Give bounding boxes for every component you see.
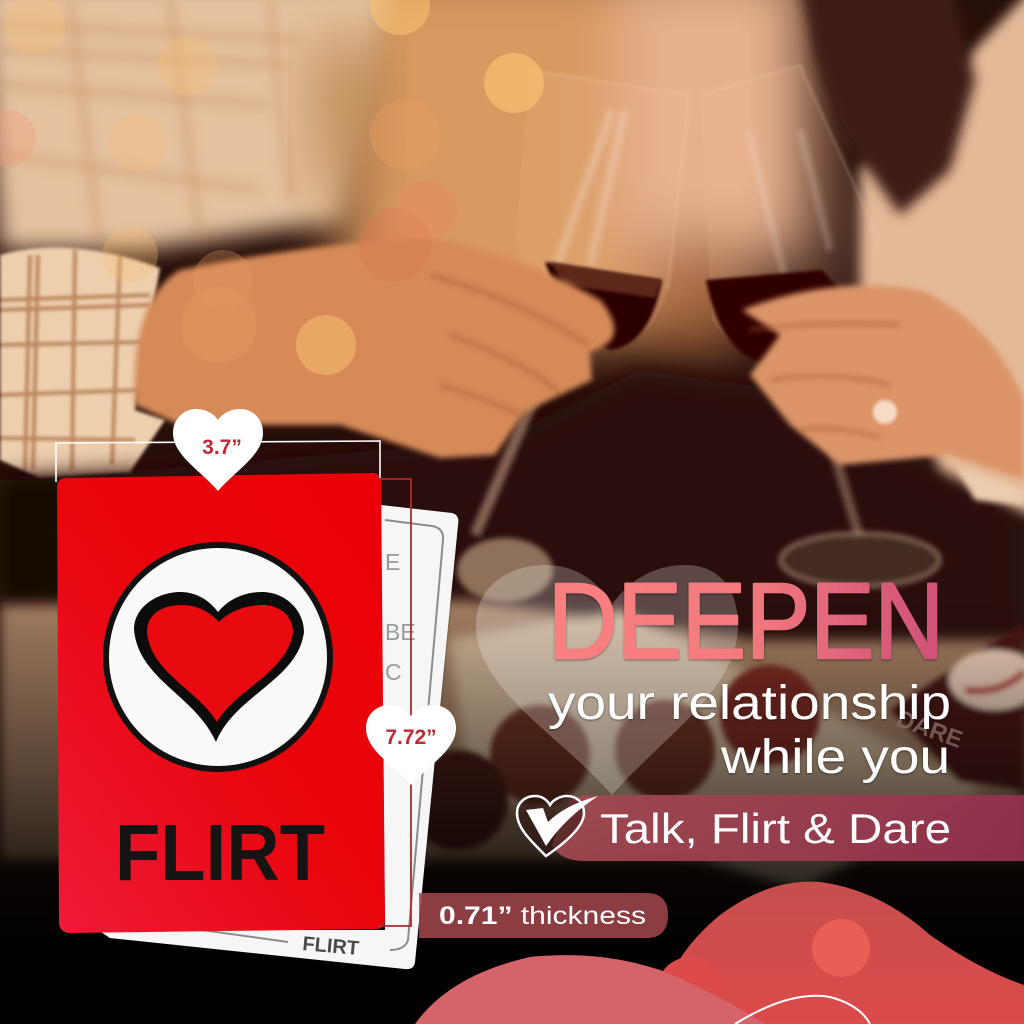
woman's hand xyxy=(742,286,1024,480)
card logo circle xyxy=(106,545,330,769)
back card: white: FLIRT xyxy=(302,933,360,960)
banner: Talk, Flirt & Dare xyxy=(552,795,1024,861)
pill: thickness: 0.71” thickness xyxy=(439,902,646,930)
woman's hair xyxy=(800,0,975,215)
dimension: height bracket xyxy=(378,479,411,926)
pill: thickness xyxy=(419,893,668,938)
back card: white xyxy=(98,505,458,969)
bottom decorative waves xyxy=(415,882,1024,1024)
icon: heart with check mark xyxy=(517,796,598,856)
man's plaid shirt xyxy=(0,0,390,250)
heart label: 7.72 inch xyxy=(366,705,456,785)
dark table xyxy=(0,370,1024,640)
headline: DEEPEN: DEEPEN xyxy=(548,560,944,681)
heart label: 7.72 inch: 7.72” xyxy=(385,726,437,749)
card heart logo xyxy=(134,592,304,742)
back card: white: E xyxy=(385,549,400,575)
bokeh lights xyxy=(0,0,544,375)
man's hand xyxy=(135,237,614,458)
heart label: 3.7 inch xyxy=(173,409,263,491)
front card: red FLIRT card xyxy=(57,473,385,933)
wine glasses xyxy=(457,65,940,602)
card label: FLIRT xyxy=(115,808,325,897)
back card: white: BE xyxy=(385,619,416,645)
table surface with chocolates xyxy=(0,600,1024,890)
subheading: your relationship: your relationship xyxy=(548,677,951,730)
back card: white: C xyxy=(385,659,402,685)
shirt cuff xyxy=(0,247,165,478)
translucent heart behind headline xyxy=(476,565,738,795)
heart label: 3.7 inch: 3.7” xyxy=(202,436,242,459)
subheading: while you: while you xyxy=(720,731,950,784)
dimension: width bracket xyxy=(56,441,380,482)
warm wall xyxy=(340,0,810,350)
background photo: couple toasting with wine: DARE xyxy=(893,705,966,754)
woman's blouse xyxy=(860,0,1024,520)
banner: Talk, Flirt & Dare: Talk, Flirt & Dare xyxy=(600,805,951,852)
bottom dark fade xyxy=(0,600,1024,940)
